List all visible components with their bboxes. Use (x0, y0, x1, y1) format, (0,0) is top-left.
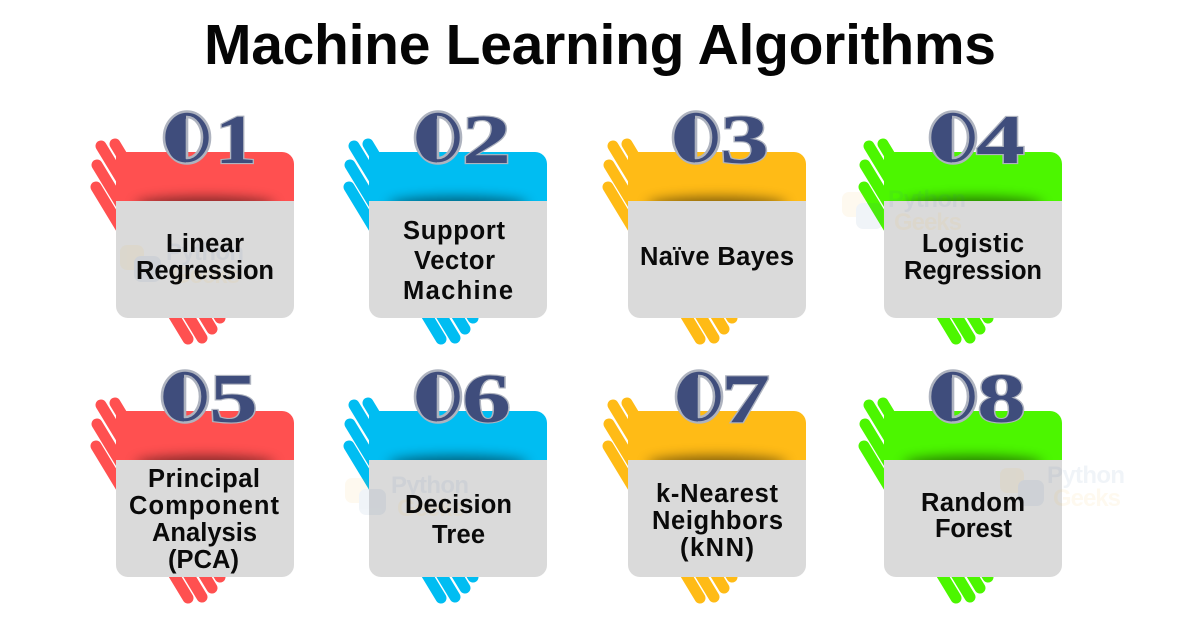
label 1: Regression (136, 257, 274, 285)
watermark 1: Python (166, 239, 244, 266)
label 4: Regression (904, 257, 1042, 285)
label 2 (403, 217, 513, 305)
card 7: k-Nearest Neighbors (608, 359, 806, 598)
label 4 (904, 230, 1042, 285)
number 05 (161, 359, 258, 438)
label 5: Component (129, 492, 280, 520)
body 2 (369, 201, 547, 318)
watermark 4: Geeks (894, 209, 962, 236)
number 03: 3 (720, 101, 769, 179)
label 8 (921, 489, 1025, 543)
watermark 8 (1000, 462, 1125, 512)
number 02 (414, 100, 511, 179)
label 4: Logistic (922, 230, 1024, 258)
number 08: 0 (929, 359, 978, 437)
label 7: Neighbors (652, 507, 783, 535)
header 1 (116, 152, 294, 201)
body 4 (884, 201, 1062, 318)
label 8: Random (921, 489, 1025, 517)
number 05: 0 (161, 359, 210, 437)
label 5: Analysis (152, 519, 257, 547)
label 7: k-Nearest (656, 480, 778, 508)
header 2 (369, 152, 547, 201)
card 8: Random Forest (864, 359, 1125, 598)
label 3: Naïve Bayes (640, 243, 794, 271)
stripes 6 (349, 403, 473, 598)
label 6: Decision (405, 491, 512, 519)
number 04: 4 (976, 101, 1025, 179)
watermark 1: Geeks (172, 262, 240, 289)
number 01: 1 (215, 101, 257, 178)
label 1 (136, 230, 274, 285)
watermark 4: Python (888, 186, 966, 213)
label 5: (PCA) (168, 546, 239, 574)
stripes 3 (608, 144, 732, 339)
watermark 6 (345, 472, 469, 522)
header 4 (884, 152, 1062, 201)
stripes 4 (864, 144, 988, 339)
label 6 (405, 491, 512, 549)
header 7 (628, 411, 806, 460)
number 08 (929, 359, 1026, 438)
label 8: Forest (935, 515, 1012, 543)
stripes 7 (608, 403, 732, 598)
header 8 (884, 411, 1062, 460)
number 06 (414, 359, 511, 438)
number 06: 6 (462, 360, 511, 438)
card 4: Logistic Regression (842, 100, 1062, 339)
label 7 (652, 480, 783, 562)
card 2: Support Vector Machine (349, 100, 547, 339)
number 06: 0 (414, 359, 463, 437)
stripes 5 (96, 403, 220, 598)
body 5 (116, 460, 294, 577)
watermark 1 (120, 239, 244, 289)
number 04 (929, 100, 1025, 179)
label 2: Support (403, 217, 506, 245)
stripes 1 (96, 144, 220, 339)
watermark 4 (842, 186, 966, 236)
body 7 (628, 460, 806, 577)
title: Machine Learning Algorithms (204, 13, 996, 77)
number 08: 8 (977, 360, 1026, 438)
number 02: 2 (462, 101, 511, 179)
label 1: Linear (166, 230, 244, 258)
stripes 2 (349, 144, 473, 339)
label 6: Tree (432, 521, 485, 549)
watermark 6: Python (391, 472, 469, 499)
number 01 (163, 100, 257, 178)
header 5 (116, 411, 294, 460)
label 2: Machine (403, 277, 513, 305)
card 6: Decision Tree (345, 359, 547, 598)
number 03: 0 (672, 100, 721, 178)
body 6 (369, 460, 547, 577)
label 5: Principal (148, 465, 260, 493)
watermark 6: Geeks (397, 495, 465, 522)
number 04: 0 (929, 100, 978, 178)
number 01: 0 (163, 100, 212, 178)
card 1: Linear Regression (96, 100, 294, 339)
label 7: (kNN) (680, 534, 754, 562)
number 07 (675, 359, 770, 438)
card 3: Naive Bayes (608, 100, 806, 339)
header 6 (369, 411, 547, 460)
stripes 8 (864, 403, 988, 598)
number 07: 7 (721, 360, 770, 438)
card 5: Principal Component Analysis (96, 359, 294, 598)
label 5 (129, 465, 280, 574)
number 07: 0 (675, 359, 724, 437)
number 02: 0 (414, 100, 463, 178)
header 3 (628, 152, 806, 201)
number 05: 5 (209, 360, 258, 438)
body 3 (628, 201, 806, 318)
label 2: Vector (414, 247, 495, 275)
body 8 (884, 460, 1062, 577)
watermark 8: Python (1047, 462, 1125, 489)
watermark 8: Geeks (1053, 485, 1121, 512)
number 03 (672, 100, 769, 179)
body 1 (116, 201, 294, 318)
